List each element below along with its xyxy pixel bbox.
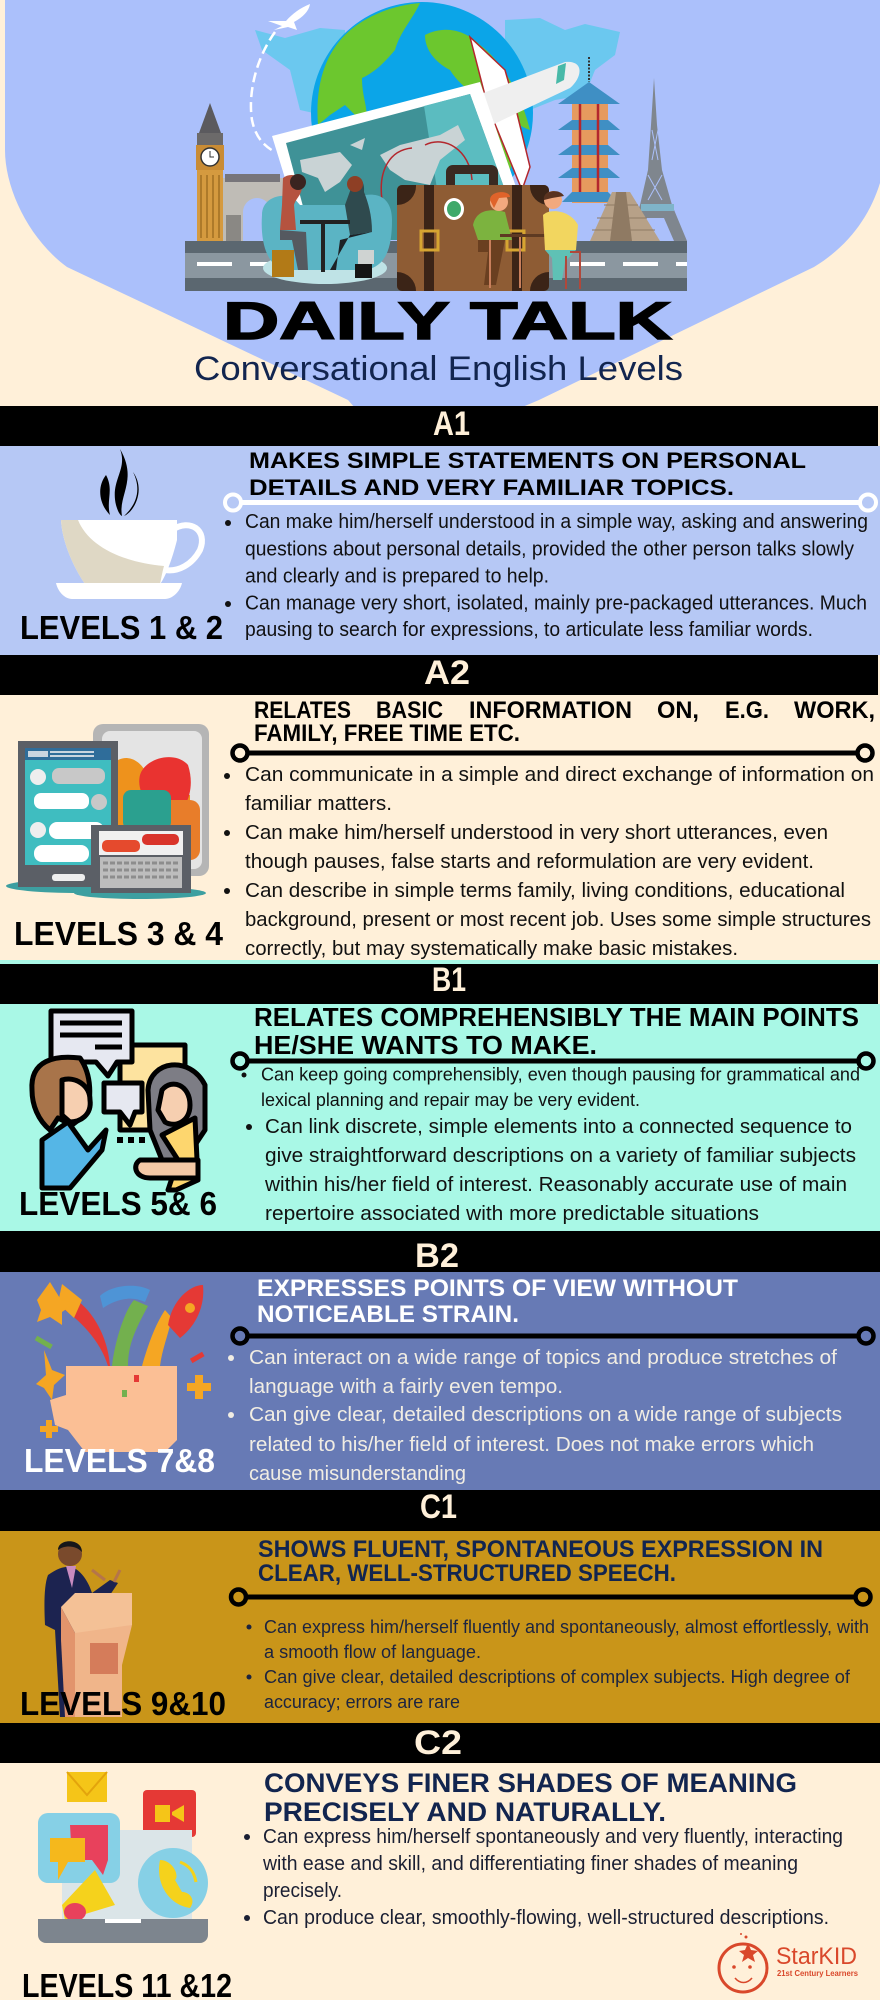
section: B2 (0, 1231, 880, 1490)
bullet list: language with a fairly even tempo. (249, 1376, 563, 1398)
divider (225, 494, 876, 510)
heading: PRECISELY AND NATURALLY. (264, 1797, 666, 1827)
bullet list (244, 1826, 843, 1929)
bullet list: Can keep going comprehensibly, even though pausing for grammatical and (261, 1064, 860, 1084)
bullet list: precisely. (263, 1880, 342, 1902)
level label: LEVELS 5& 6 (19, 1185, 217, 1222)
bullet list: cause misunderstanding (249, 1463, 466, 1485)
heading: CLEAR, WELL-STRUCTURED SPEECH. (258, 1560, 676, 1587)
bullet list: correctly, but may systematically make basic mistakes. (245, 938, 738, 960)
heading: NOTICEABLE STRAIN. (257, 1301, 519, 1328)
subtitle: Conversational English Levels (194, 350, 683, 388)
section: A1 (0, 405, 880, 655)
bullet list: give straightforward descriptions on a variety of familiar subjects (265, 1145, 856, 1167)
bullet list: Can link discrete, simple elements into a connected sequence to (265, 1116, 852, 1138)
heading: ON, (657, 697, 699, 724)
heading: CONVEYS FINER SHADES OF MEANING (264, 1768, 797, 1798)
icon: couple at cafe table (473, 191, 580, 289)
bullet list: questions about personal details, provided the other person talks slowly (245, 538, 854, 560)
icon: suitcase (397, 165, 549, 291)
divider (232, 1328, 874, 1344)
bullet list: pausing to search for expressions, to articulate less familiar words. (245, 619, 813, 641)
bullet list: lexical planning and repair may be very evident. (261, 1090, 640, 1110)
bullet list: with ease and skill, and differentiating finer shades of meaning (262, 1853, 798, 1875)
heading: WORK, (794, 697, 875, 724)
bullet list: Can communicate in a simple and direct exchange of information on (245, 764, 874, 786)
bullet list: related to his/her field of interest. Does not make errors which (249, 1434, 814, 1456)
label: B2: B2 (415, 1237, 459, 1275)
bullet list: Can express him/herself spontaneously and very fluently, interacting (263, 1826, 843, 1848)
heading: INFORMATION (469, 697, 632, 724)
label: A2: A2 (424, 654, 470, 692)
bullet list: and clearly and is prepared to help. (245, 566, 549, 588)
icon: devices with chat (6, 724, 209, 899)
heading (254, 1002, 859, 1060)
section: C2 (0, 1723, 880, 2000)
heading: SHOWS FLUENT, SPONTANEOUS EXPRESSION IN (258, 1536, 823, 1563)
bullet list: a smooth flow of language. (264, 1642, 481, 1662)
heading: HE/SHE WANTS TO MAKE. (254, 1030, 597, 1060)
heading: DETAILS AND VERY FAMILIAR TOPICS. (249, 475, 734, 500)
level label: LEVELS 7&8 (24, 1442, 215, 1479)
icon: ellipsis dots (117, 1137, 145, 1143)
level label: LEVELS 9&10 (20, 1685, 226, 1722)
section: B1 (0, 961, 880, 1231)
section: A2 (0, 654, 880, 964)
icon: speaker at podium (44, 1541, 132, 1717)
icon: dashed flight path (251, 32, 275, 152)
bullet list: Can give clear, detailed descriptions of complex subjects. High degree of (264, 1667, 851, 1687)
bullet list: Can make him/herself understood in a simple way, asking and answering (245, 511, 868, 533)
bullet list (228, 1347, 842, 1485)
bullet list (225, 511, 868, 641)
bullet list: within his/her field of interest. Reasonably accurate use of main (264, 1174, 847, 1196)
logo: StarKID (719, 1933, 859, 1992)
icon: cafe scene with two women (262, 174, 392, 284)
divider (232, 1054, 874, 1068)
icon: Arc de Triomphe (223, 174, 283, 241)
icon: map poster (272, 82, 520, 240)
bullet list (246, 1617, 869, 1712)
label: C1: C1 (420, 1488, 457, 1526)
bullet list: though pauses, false starts and reformulation are very evident. (245, 851, 814, 873)
bullet list: background, present or most recent job. Uses some simple structures (245, 909, 871, 931)
icon: Big Ben (196, 103, 224, 241)
heading: RELATES (254, 697, 351, 724)
logo: StarKID: StarKID (776, 1943, 857, 1970)
divider (231, 1590, 870, 1604)
heading: E.G. (725, 697, 769, 724)
icon: world map backdrop (255, 18, 620, 120)
icon: creative head (35, 1282, 211, 1452)
level label: LEVELS 1 & 2 (20, 609, 223, 646)
bullet list: familiar matters. (245, 793, 392, 815)
title: DAILY TALK (223, 292, 672, 351)
bullet list: accuracy; errors are rare (264, 1692, 460, 1712)
icon: globe (311, 2, 533, 224)
bullet list: repertoire associated with more predictable situations (265, 1203, 759, 1225)
icon: Eiffel Tower (626, 78, 687, 241)
label: A1: A1 (433, 405, 470, 443)
bullet list (224, 764, 874, 960)
heading (264, 1768, 797, 1827)
section: C1 (0, 1488, 880, 1723)
heading: BASIC (376, 697, 443, 724)
heading (254, 697, 875, 747)
heading: MAKES SIMPLE STATEMENTS ON PERSONAL (249, 448, 806, 473)
level label: LEVELS 3 & 4 (14, 915, 224, 952)
divider (232, 746, 872, 760)
bullet list: Can express him/herself fluently and spontaneously, almost effortlessly, with (264, 1617, 869, 1637)
icon: pagoda (558, 57, 620, 203)
icon: road (185, 241, 687, 291)
bullet list: Can make him/herself understood in very short utterances, even (245, 822, 828, 844)
bullet list: Can interact on a wide range of topics and produce stretches of (249, 1347, 837, 1369)
icon: large plane (470, 37, 580, 190)
heading: FAMILY, FREE TIME ETC. (254, 720, 520, 747)
bullet list: Can manage very short, isolated, mainly pre-packaged utterances. Much (245, 592, 867, 614)
heading: RELATES COMPREHENSIBLY THE MAIN POINTS (254, 1002, 859, 1032)
icon: small plane (268, 4, 310, 30)
bullet list: Can give clear, detailed descriptions on a wide range of subjects (249, 1404, 842, 1426)
heading: EXPRESSES POINTS OF VIEW WITHOUT (257, 1275, 738, 1302)
heading (258, 1536, 823, 1587)
bullet list: Can produce clear, smoothly-flowing, well-structured descriptions. (263, 1907, 829, 1929)
logo: StarKID: 21st Century Learners (777, 1969, 859, 1978)
icon: two people talking (32, 1011, 205, 1190)
heading (257, 1275, 738, 1328)
label: C2: C2 (414, 1724, 462, 1762)
icon: pyramid (590, 192, 660, 241)
label: B1: B1 (432, 961, 466, 999)
heading (249, 448, 806, 500)
icon: coffee cup (56, 449, 202, 599)
bullet list (242, 1064, 860, 1225)
header panel (5, 0, 880, 408)
icon: communication apps (38, 1772, 208, 1943)
bullet list: Can describe in simple terms family, living conditions, educational (245, 880, 845, 902)
